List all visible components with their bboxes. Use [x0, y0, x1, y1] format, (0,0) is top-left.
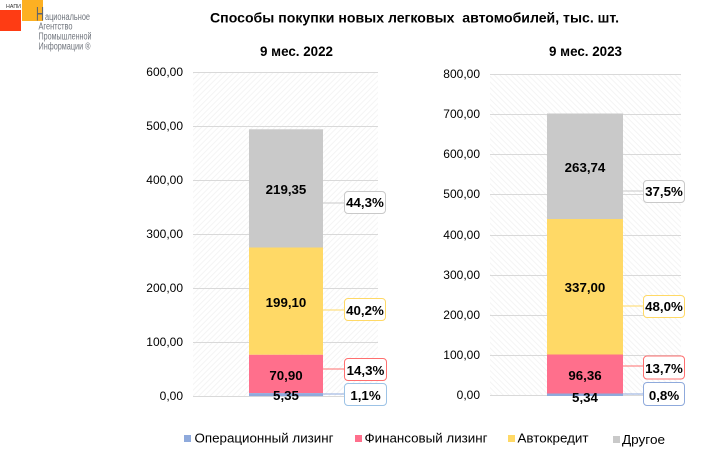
y axis labels: 100,00: [146, 335, 183, 349]
bar value labels: 96,36: [568, 368, 602, 383]
logo: ациональное: [45, 12, 90, 23]
logo: Промышленной: [38, 32, 92, 42]
share callouts: 44,3%: [346, 195, 384, 210]
share callouts: 13,7%: [645, 361, 683, 376]
legend: Другое: [622, 432, 665, 447]
bar value labels: 199,10: [266, 295, 306, 310]
y axis labels: 200,00: [443, 308, 480, 322]
legend: [184, 430, 665, 447]
share callouts: [623, 180, 684, 406]
chart heading 2022: 9 мес. 2022: [260, 44, 333, 59]
y axis labels: 0,00: [457, 388, 480, 402]
y axis labels: 600,00: [146, 65, 183, 79]
share callouts: [323, 192, 386, 406]
bar value labels: [565, 160, 606, 405]
chart: 9 months 2022: [146, 65, 386, 406]
title: Способы покупки новых легковых автомобилей, тыс. шт.: [210, 10, 619, 26]
plot area background: [490, 74, 681, 396]
y axis labels: 400,00: [443, 228, 480, 242]
gridlines: [193, 72, 378, 396]
y axis labels: 500,00: [146, 119, 183, 133]
y axis labels: 0,00: [160, 389, 183, 403]
share callouts: 14,3%: [347, 363, 385, 378]
logo: Информации ®: [38, 40, 91, 52]
share callouts: 0,8%: [649, 388, 679, 403]
chart: 9 months 2023: [443, 67, 684, 406]
y axis labels: 500,00: [443, 187, 480, 201]
stacked bar: [249, 129, 323, 396]
y axis labels: [146, 65, 183, 403]
bar value labels: 5,35: [273, 388, 300, 403]
bar value labels: 263,74: [565, 160, 606, 175]
y axis labels: 800,00: [443, 67, 480, 81]
y axis labels: 100,00: [443, 348, 480, 362]
logo: [0, 0, 92, 52]
y axis labels: 200,00: [146, 281, 183, 295]
y axis labels: 300,00: [443, 268, 480, 282]
share callouts: 40,2%: [346, 303, 384, 318]
y axis labels: 600,00: [443, 147, 480, 161]
bar value labels: 337,00: [565, 280, 605, 295]
legend: Финансовый лизинг: [364, 430, 488, 446]
bar value labels: 219,35: [266, 182, 307, 197]
y axis labels: 700,00: [443, 107, 480, 121]
share callouts: 1,1%: [350, 388, 381, 403]
legend: Автокредит: [518, 430, 589, 446]
chart heading 2023: 9 мес. 2023: [549, 44, 622, 59]
y axis labels: 400,00: [146, 173, 183, 187]
bar value labels: [266, 182, 307, 403]
bar value labels: 5,34: [572, 390, 599, 405]
gridlines: [490, 74, 681, 396]
logo: Агентство: [38, 22, 73, 32]
y axis labels: [443, 67, 480, 402]
stacked bar: [547, 114, 623, 396]
y axis labels: 300,00: [146, 227, 183, 241]
logo: Н: [36, 4, 44, 26]
plot area background: [193, 72, 378, 396]
logo: НАПИ: [6, 4, 21, 10]
share callouts: 37,5%: [645, 184, 683, 199]
bar value labels: 70,90: [269, 368, 303, 383]
share callouts: 48,0%: [645, 299, 683, 314]
legend: Операционный лизинг: [194, 430, 334, 446]
